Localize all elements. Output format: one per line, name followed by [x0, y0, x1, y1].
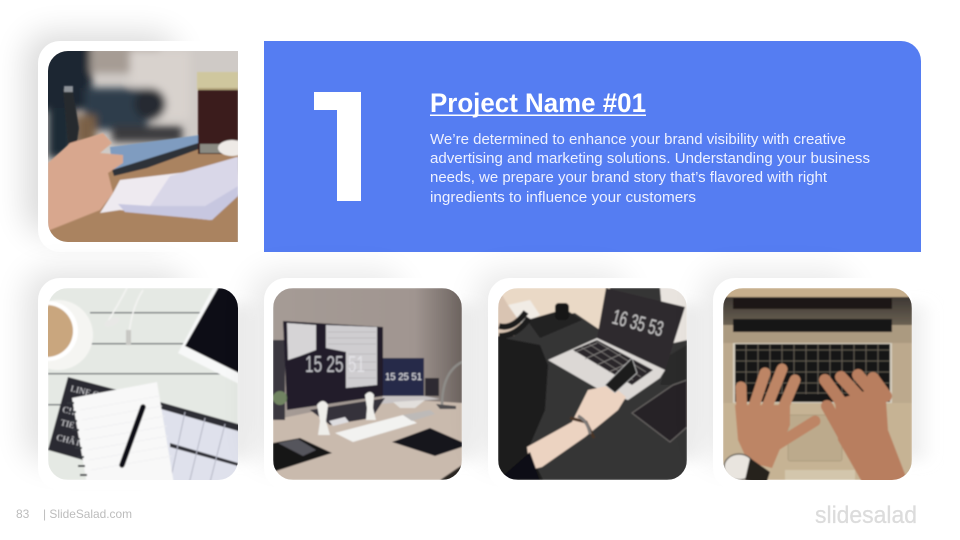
body text: advertising and marketing solutions. Understanding your business [430, 150, 870, 167]
photo: monitor and laptop on a wooden desk: 15 25 51 [385, 371, 422, 383]
heading: Project Name #01 [430, 88, 646, 118]
body text: ingredients to influence your customers [430, 189, 696, 206]
body text [430, 131, 870, 206]
photo: monitor and laptop on a wooden desk: 15 25 51 [305, 351, 365, 377]
photo: white desk with coffee, tablet and notebook: CHÂT [56, 432, 82, 448]
photo: hand writing in a notebook [48, 51, 238, 242]
panel: project description [264, 41, 921, 252]
numeral 1: 1 [303, 61, 390, 235]
page number: 83 [16, 507, 30, 521]
photo: arm holding a phone over a laptop: 16 35 53 [610, 306, 666, 341]
photo: white desk with coffee, tablet and notebook [48, 288, 238, 480]
body text: We’re determined to enhance your brand visibility with creative [430, 131, 846, 148]
photo: white desk with coffee, tablet and notebook: CH [62, 404, 77, 417]
photo: monitor and laptop on a wooden desk [273, 288, 462, 480]
logo wordmark: slidesalad [815, 502, 917, 529]
body text: needs, we prepare your brand story that’s flavored with right [430, 169, 828, 186]
footer site name: | SlideSalad.com [43, 507, 132, 521]
panel: featured photo card [26, 34, 246, 260]
panel: photo card, hands typing [702, 272, 934, 490]
panel: photo card, desk with notebook [18, 272, 260, 490]
photo: white desk with coffee, tablet and notebook: LINE O [70, 383, 101, 400]
photo: hands typing on a laptop keyboard [723, 288, 912, 484]
panel: photo card, laptop and phone [477, 272, 709, 490]
photo: white desk with coffee, tablet and notebook: TIE [60, 417, 76, 430]
photo: arm holding a phone over a laptop [498, 288, 687, 480]
panel: photo card, workstation [252, 272, 484, 490]
